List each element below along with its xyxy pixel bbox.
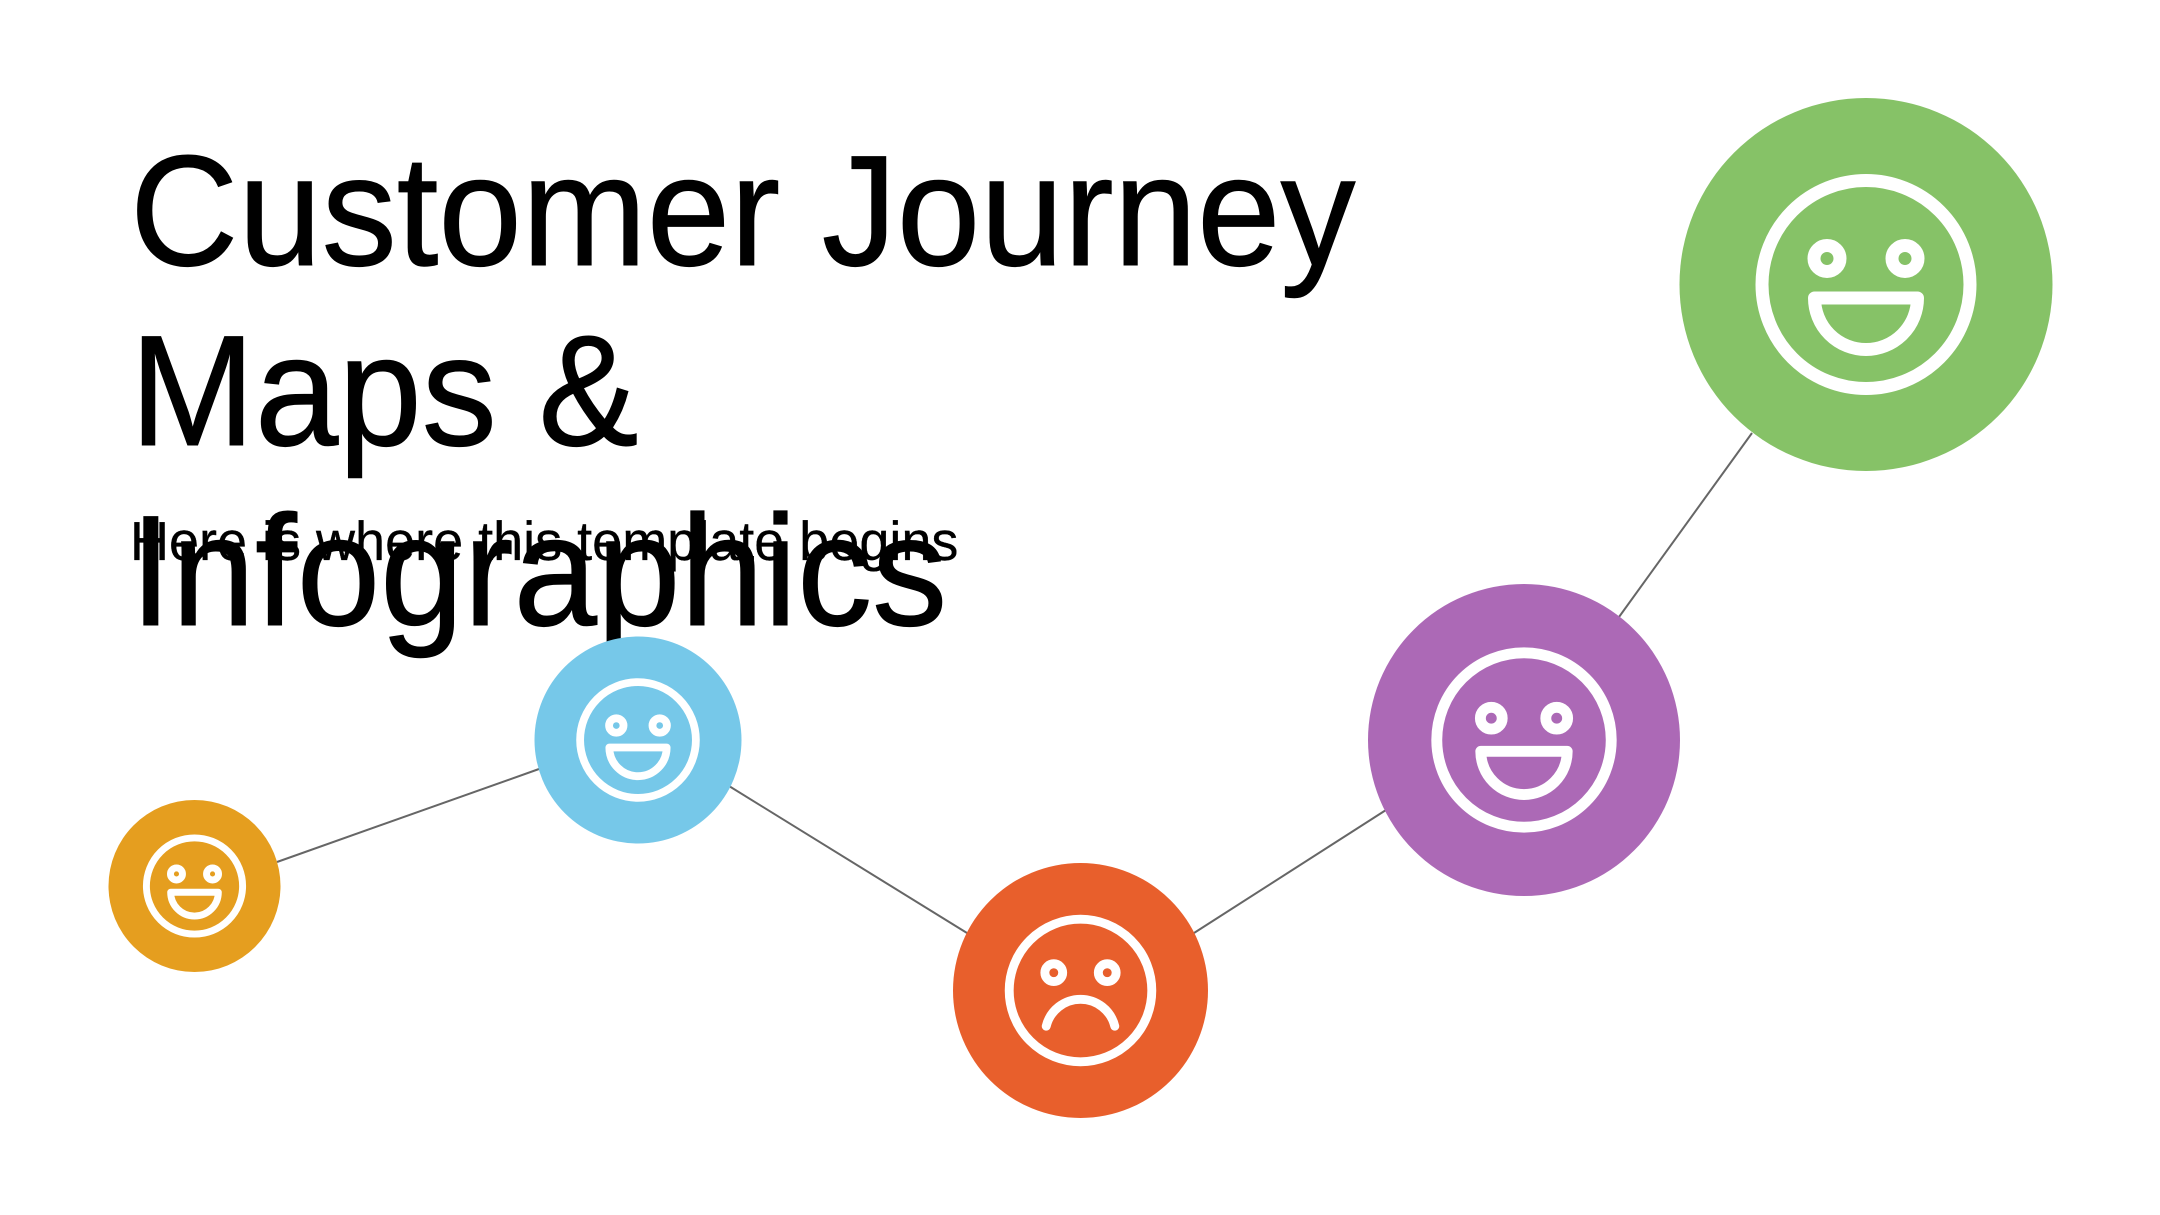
stage 2: blue happy face	[534, 636, 742, 844]
stage 5: green happy face	[1680, 98, 2052, 471]
title	[130, 122, 1356, 659]
stage 3: orange sad face	[953, 863, 1208, 1118]
stage 1: amber happy face	[108, 800, 280, 972]
title: Customer Journey	[130, 122, 1356, 299]
subtitle: Here is where this template begins	[130, 511, 958, 572]
stage 4: purple happy face	[1368, 584, 1680, 896]
connector lines	[277, 433, 1752, 933]
title: Maps &	[130, 302, 639, 479]
title: Infographics	[130, 482, 947, 659]
